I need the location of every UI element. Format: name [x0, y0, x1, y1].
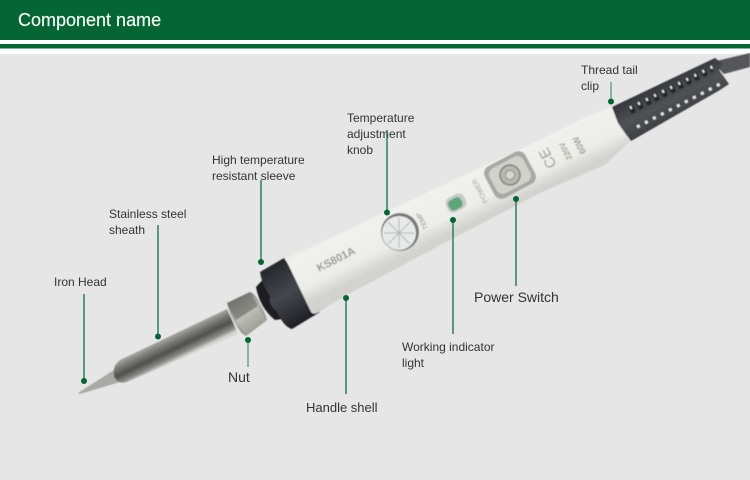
temperature knob: [381, 213, 419, 251]
label: handle shell: [306, 295, 378, 415]
label: thread tail clip: Thread tail: [581, 63, 638, 77]
label: thread tail clip: clip: [581, 79, 599, 93]
label: thread tail clip: [581, 63, 638, 104]
nut: [227, 292, 267, 336]
steel sheath: [114, 309, 238, 383]
voltage rating: 220V: [557, 140, 574, 162]
label: stainless steel sheath: [109, 207, 186, 340]
knob scale label: TEMP: [415, 211, 430, 230]
label: working indicator light: [402, 217, 494, 370]
label: high temperature resistant sleeve: resistant sleeve: [212, 169, 296, 183]
label: temperature adjustment knob: adjustment: [347, 127, 406, 141]
CE mark: CE: [536, 145, 561, 171]
tail clip: [612, 58, 729, 141]
black collar: [260, 258, 320, 329]
power switch: [481, 148, 539, 202]
wattage rating: 60W: [570, 134, 588, 156]
label: nut: Nut: [228, 369, 250, 385]
label: stainless steel sheath: sheath: [109, 223, 145, 237]
label: nut: [228, 337, 251, 385]
label: temperature adjustment knob: knob: [347, 143, 373, 157]
label: high temperature resistant sleeve: [212, 153, 305, 265]
black neck: [256, 270, 290, 320]
white handle: [285, 106, 630, 314]
label: temperature adjustment knob: [347, 111, 415, 216]
label: power switch: Power Switch: [474, 289, 559, 305]
header banner: [0, 0, 750, 48]
label: high temperature resistant sleeve: High temperature: [212, 153, 305, 167]
power label: POWER: [472, 177, 490, 204]
title: Component name: [18, 10, 161, 30]
label: power switch: [474, 196, 559, 305]
indicator light: [443, 191, 469, 215]
label: working indicator light: Working indicator: [402, 340, 494, 354]
label: iron head: Iron Head: [54, 275, 107, 289]
label: temperature adjustment knob: Temperature: [347, 111, 415, 125]
iron tip: [78, 370, 120, 394]
label: stainless steel sheath: Stainless steel: [109, 207, 186, 221]
label: handle shell: Handle shell: [306, 400, 378, 415]
soldering iron: [78, 53, 750, 394]
model label: KS801A: [315, 245, 357, 275]
power cable: [712, 53, 750, 74]
label: iron head: [54, 275, 107, 384]
label: working indicator light: light: [402, 356, 425, 370]
